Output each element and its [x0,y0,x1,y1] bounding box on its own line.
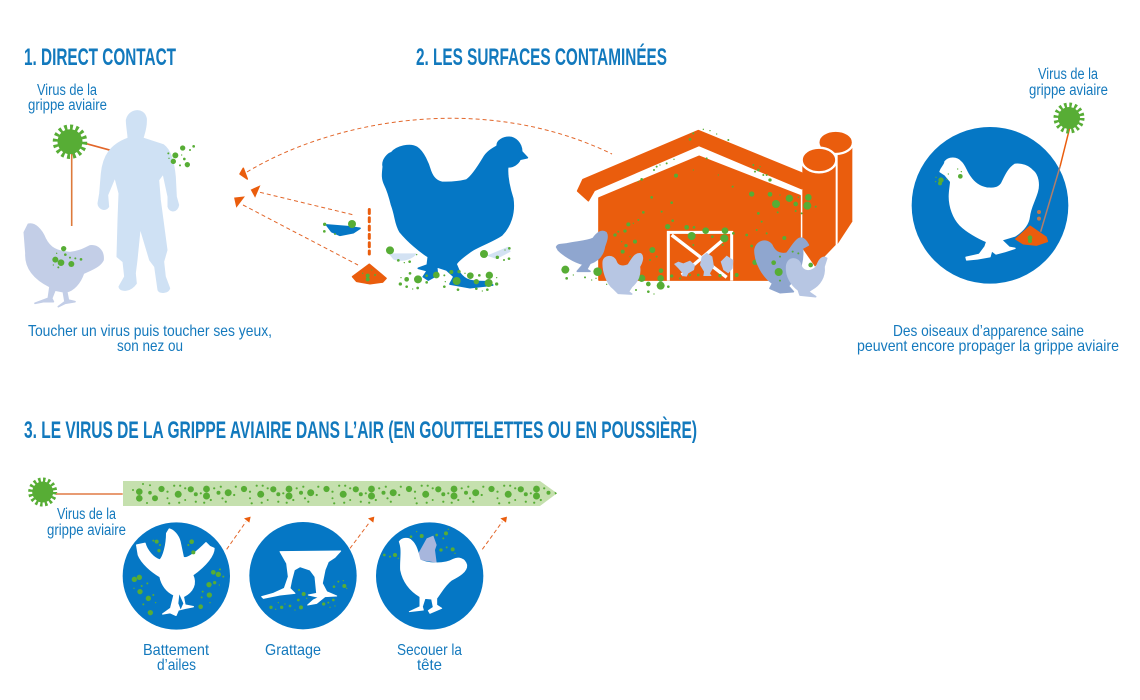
label: virus: Virus de la [57,506,116,523]
icon: blue circle with white hen [912,127,1070,284]
icon: virus [31,480,55,504]
caption: head shaking: tête [417,657,442,674]
circle: scratching [249,522,357,629]
dashed arrow: scratching [350,517,374,548]
panel: contaminated surfaces [235,43,853,297]
panel: healthy-looking birds [857,66,1119,355]
dashed arrow: head shaking [482,517,507,549]
icon: virus [56,127,84,156]
caption: wing flapping: d’ailes [157,657,196,674]
icon: grey hen with virus [24,224,103,307]
dashed arrow: pile to person [235,197,358,265]
heading: direct contact: 1. DIRECT CONTACT [24,44,176,71]
dashed arrow: barn to person [240,118,612,179]
caption: healthy-looking birds: Des oiseaux d’apparence saine [893,323,1084,340]
label: virus [47,506,126,539]
caption: head shaking [397,642,462,674]
heading: airborne virus: 3. LE VIRUS DE LA GRIPPE AVIAIRE DANS L’AIR (EN GOUTTELETTES OU EN POUSSIÈRE) [24,416,697,444]
panel: airborne virus [24,416,697,674]
caption: healthy-looking birds [857,323,1119,355]
label: virus: Virus de la [1038,66,1098,83]
label: virus: grippe aviaire [28,97,107,114]
icon: blue hen and droppings [323,137,527,292]
caption: wing flapping [143,642,209,674]
caption: scratching: Grattage [265,642,321,659]
dashed arrow: wing flapping [227,517,251,549]
virus droplet arrow band [123,481,567,506]
dashed arrow: droppings to person [252,187,354,215]
caption: direct contact [28,323,272,355]
label: virus: grippe aviaire [47,522,126,539]
icon: orange pile [353,264,386,284]
label: virus [28,82,107,114]
icon: virus spray on person [167,145,195,167]
label: virus: Virus de la [37,82,97,99]
heading: contaminated surfaces: 2. LES SURFACES CONTAMINÉES [416,43,667,71]
icon: virus [1056,105,1082,131]
connector lines from virus [72,143,112,226]
icon: dashed orange column [368,210,371,254]
caption: direct contact: son nez ou [117,338,183,355]
caption: head shaking: Secouer la [397,642,462,659]
label: virus: grippe aviaire [1029,82,1108,99]
caption: direct contact: Toucher un virus puis toucher ses yeux, [28,323,272,340]
circle: head shaking [376,522,483,630]
icon: human silhouette [98,111,178,292]
circle: wing flapping [123,522,230,630]
icon: barn with silos [557,129,853,297]
connector line [56,493,123,495]
panel: direct contact [24,44,272,355]
label: virus [1029,66,1108,99]
caption: wing flapping: Battement [143,642,209,659]
